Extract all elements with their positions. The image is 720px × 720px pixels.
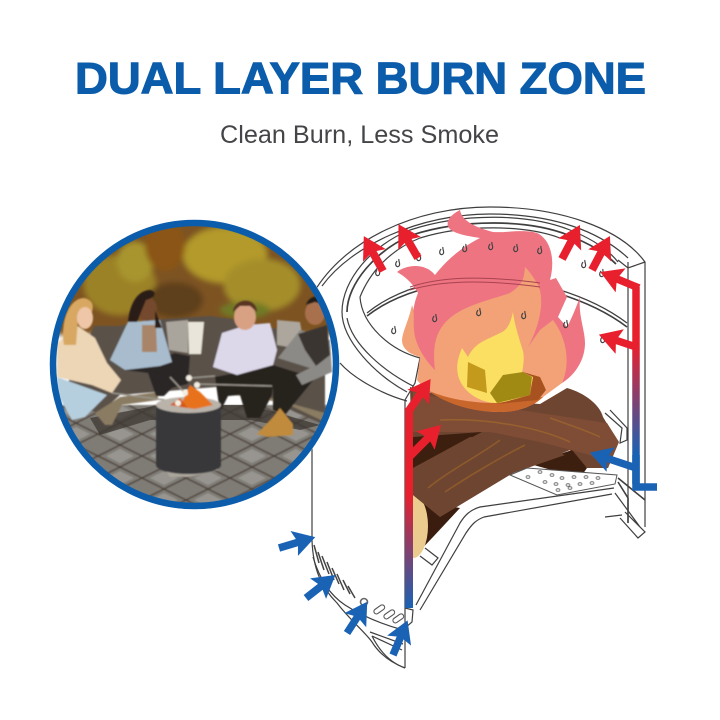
subtitle: Clean Burn, Less Smoke [220,121,499,149]
log grain: crossing [440,418,600,442]
perforated plate [510,468,617,495]
air holes [376,242,605,343]
hands and sticks [112,376,272,400]
log grain: front [428,440,525,492]
front log [413,437,565,517]
person 3 [213,301,277,418]
person 4 [257,297,332,437]
flame: inner yellow [457,312,533,403]
white backing [50,220,340,510]
arrow: right wall channel [606,278,657,487]
base log mass [410,387,618,517]
shadow under sofa [90,405,320,435]
title: DUAL LAYER BURN ZONE [75,54,646,104]
fire pit outline [312,207,645,668]
dark lower shadow log [413,500,460,558]
flame over logs: gold leaf [467,362,487,393]
arrows: blue air intake [279,542,401,655]
person 1 [57,298,121,420]
arrows: red top exhaust [372,239,602,271]
rug [62,404,327,503]
flame over logs: brown red [497,372,546,404]
cushions [166,320,188,353]
photo border [53,223,336,506]
person 2 [110,290,190,396]
arrow: left wall channel [408,393,429,608]
fire pit in photo [156,385,221,477]
sofa wicker [95,388,325,425]
crossing log [413,392,619,468]
diagram: fire pit cross-section [279,207,657,668]
ring seen through flame [410,278,540,290]
trees background [58,226,330,340]
sofa [60,316,325,425]
dark log gap [413,432,587,478]
photo: group around fire pit [45,215,345,510]
flame over logs: orange band [427,390,543,412]
flame over logs: olive [490,372,532,403]
marshmallows [175,375,200,406]
flame: outer pink [397,210,585,405]
log end [413,495,428,558]
flame: middle orange [402,267,567,412]
vent hatching [314,545,355,598]
vent slots [360,598,405,624]
